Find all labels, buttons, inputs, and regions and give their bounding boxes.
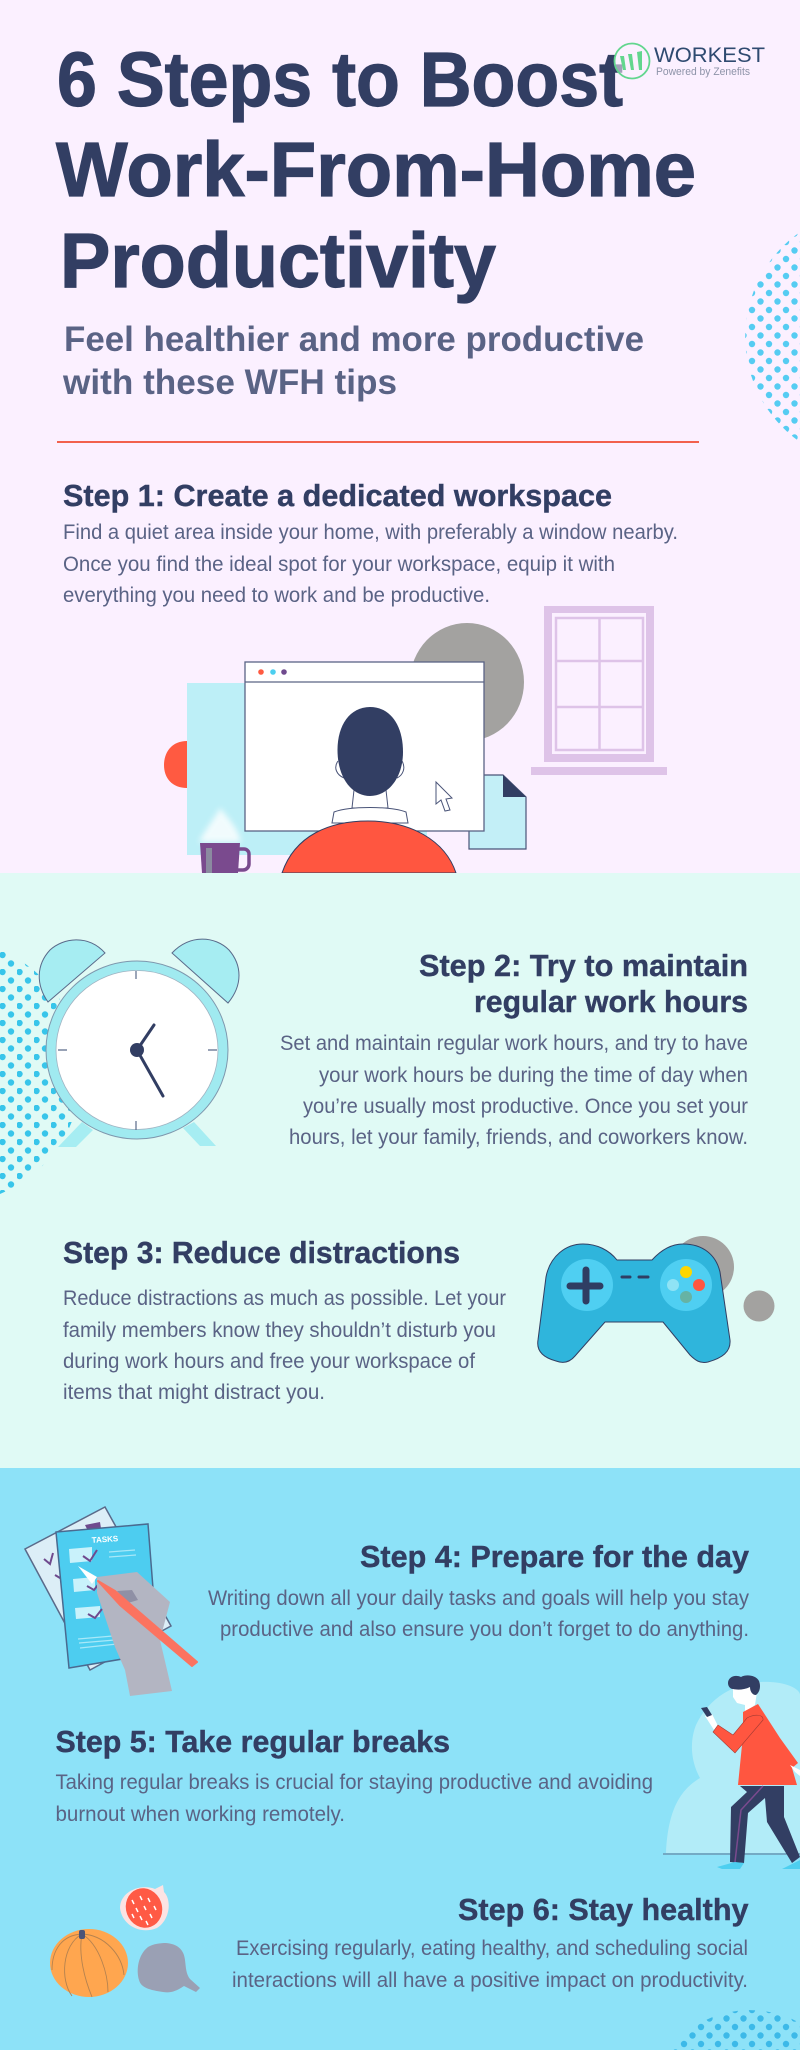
icon: game controller — [538, 1236, 774, 1363]
icon: task lists and writing hand: TASKS — [91, 1534, 119, 1545]
step 2 body text: Set and maintain regular work hours, and try to have — [280, 1032, 748, 1055]
browser window — [245, 662, 484, 831]
steam — [199, 808, 241, 842]
panel: steps 2 and 3 — [0, 873, 800, 1468]
title: Work-From-Home — [56, 127, 696, 213]
step 5 body text: burnout when working remotely. — [56, 1803, 345, 1826]
logo: Workest: Powered by Zenefits — [656, 66, 750, 78]
title: 6 Steps to Boost — [57, 37, 623, 123]
subtitle: with these WFH tips — [62, 363, 397, 402]
step 6 heading: Step 6: Stay healthy — [458, 1893, 749, 1927]
step 3 body text: during work hours and free your workspace of — [63, 1350, 475, 1373]
step 1 body text: Once you find the ideal spot for your workspace, equip it with — [63, 553, 615, 576]
step 3 heading: Step 3: Reduce distractions — [63, 1236, 460, 1270]
decorative dotted circle — [668, 2010, 800, 2050]
subtitle: Feel healthier and more productive — [64, 320, 644, 359]
step 6 body text: interactions will all have a positive impact on productivity. — [232, 1969, 748, 1992]
step 5 body text: Taking regular breaks is crucial for staying productive and avoiding — [56, 1771, 653, 1794]
cursor — [436, 782, 452, 811]
step 3 body text: family members know they shouldn’t disturb you — [63, 1319, 496, 1342]
red half circle — [164, 741, 187, 788]
divider line — [57, 441, 699, 443]
step 1 body text: Find a quiet area inside your home, with preferably a window nearby. — [63, 521, 678, 544]
step 4 heading: Step 4: Prepare for the day — [360, 1540, 749, 1574]
coffee mug — [200, 843, 249, 873]
step 5 heading: Step 5: Take regular breaks — [56, 1725, 450, 1759]
icon: task lists and writing hand — [25, 1507, 197, 1696]
grey circle — [410, 623, 524, 741]
panel: steps 4, 5 and 6 — [0, 1468, 800, 2050]
step 6 body text: Exercising regularly, eating healthy, and scheduling social — [236, 1937, 748, 1960]
step 1 body text: everything you need to work and be productive. — [63, 584, 490, 607]
logo: Workest: WORKEST — [654, 44, 765, 67]
step 4 body text: productive and also ensure you don’t forget to do anything. — [220, 1618, 749, 1641]
subtitle — [62, 320, 644, 402]
logo: Workest — [614, 44, 765, 78]
step 5 body text — [56, 1771, 653, 1826]
person from behind — [282, 707, 456, 873]
icon: alarm clock — [39, 939, 239, 1147]
step 2 body text — [280, 1032, 748, 1149]
step 4 body text: Writing down all your daily tasks and goals will help you stay — [208, 1587, 749, 1610]
title — [56, 37, 696, 304]
step 2 body text: your work hours be during the time of day when — [319, 1064, 748, 1087]
light blue panel — [187, 683, 427, 855]
step 3 body text: Reduce distractions as much as possible. Let your — [63, 1287, 506, 1310]
window — [531, 606, 667, 775]
document — [469, 775, 526, 849]
step 1 heading: Step 1: Create a dedicated workspace — [63, 479, 612, 513]
step 3 body text: items that might distract you. — [63, 1381, 325, 1404]
panel: header and step 1 — [55, 42, 800, 873]
step 2 body text: hours, let your family, friends, and coworkers know. — [289, 1126, 748, 1149]
illustration: person at computer — [164, 606, 667, 873]
step 1 body text — [63, 521, 678, 607]
step 2 heading — [419, 949, 748, 1019]
illustration: pumpkin and figs — [50, 1883, 200, 1997]
step 2 heading: regular work hours — [474, 985, 748, 1019]
title: Productivity — [60, 218, 496, 304]
illustration: walking person with phone — [663, 1675, 800, 1869]
step 4 body text — [208, 1587, 749, 1641]
step 2 heading: Step 2: Try to maintain — [419, 949, 748, 983]
step 3 body text — [63, 1287, 506, 1404]
decorative dotted circle — [745, 232, 800, 442]
decorative dotted shape — [0, 950, 82, 1194]
step 6 body text — [232, 1937, 748, 1992]
step 2 body text: you’re usually most productive. Once you set your — [303, 1095, 748, 1118]
